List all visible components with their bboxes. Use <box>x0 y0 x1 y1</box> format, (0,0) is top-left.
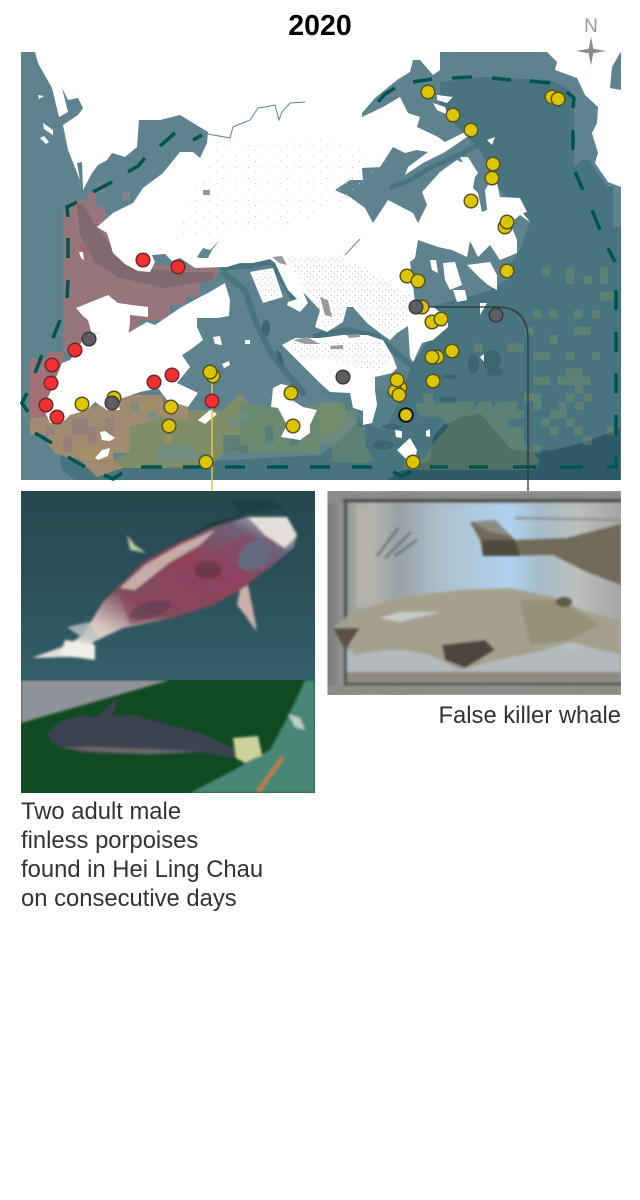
map of Hong Kong waters with photos <box>20 18 621 793</box>
red stranding points <box>39 253 219 424</box>
land: north-east corner <box>547 52 621 187</box>
land: Shenzhen, New Territories and Kowloon <box>35 52 530 362</box>
maritime boundary dashed line <box>22 77 616 479</box>
yellow stranding points <box>75 85 565 469</box>
icon: north compass: N <box>584 16 598 37</box>
land: outlying islands <box>38 95 497 460</box>
caption: finless porpoises: Two adult male <box>21 798 181 825</box>
land: airport and Lantau island <box>43 283 230 423</box>
icon: north compass <box>576 16 606 66</box>
urban speckle <box>170 135 410 372</box>
yellow point with black outline <box>399 408 413 422</box>
heat: green tiles east <box>320 267 615 470</box>
land: Tsing Yi <box>250 268 283 303</box>
panel: map <box>21 52 621 480</box>
heat: brown density zone <box>30 395 188 477</box>
small water inlet <box>197 240 220 258</box>
grey stranding points <box>82 300 503 410</box>
connector: yellow line to porpoise photo <box>211 376 213 491</box>
caption: finless porpoises: on consecutive days <box>21 885 237 912</box>
caption: finless porpoises: found in Hei Ling Chau <box>21 856 263 883</box>
photo: finless porpoise on teal water <box>21 491 315 680</box>
photo: false killer whale on steel tray <box>328 491 624 695</box>
title: 2020 <box>288 10 352 42</box>
connector: dark line to false killer whale photo <box>420 307 528 491</box>
heat: pink density zone <box>30 192 220 425</box>
photo: finless porpoise on green water <box>21 680 315 793</box>
heat: green-olive density zone <box>223 403 345 453</box>
caption: finless porpoises <box>21 798 263 912</box>
heat: mottled tiles over south Lantau waters <box>47 402 298 462</box>
land: Hong Kong island <box>282 335 397 425</box>
heat: olive density zone <box>113 393 248 468</box>
caption: finless porpoises: finless porpoises <box>21 827 198 854</box>
shallow water patches <box>373 350 503 450</box>
caption: false killer whale: False killer whale <box>438 702 621 729</box>
river boundary <box>208 102 305 138</box>
